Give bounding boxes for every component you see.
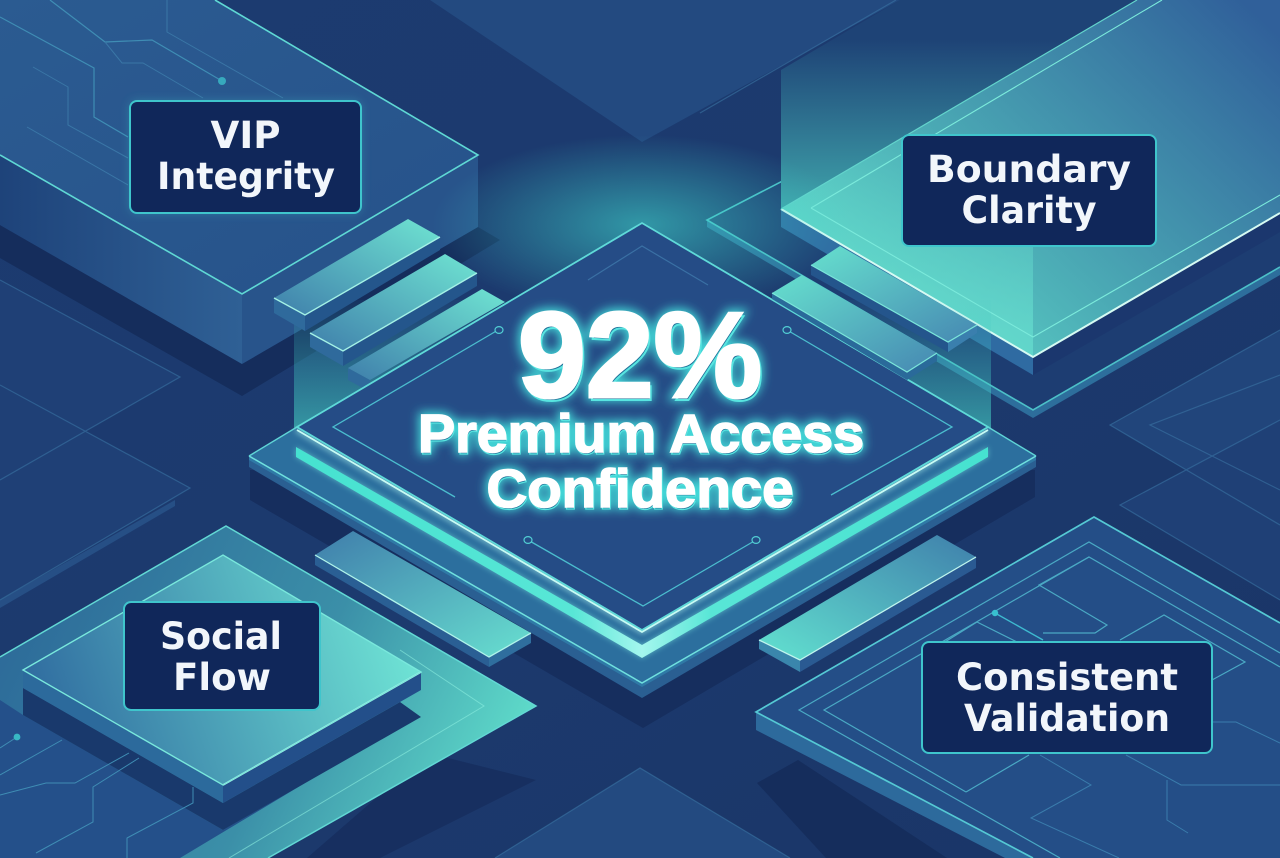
label: Premium Access Confidence: Confidence — [488, 461, 794, 521]
label: Boundary Clarity — [902, 135, 1156, 246]
value: 92%: 92% — [520, 290, 764, 426]
label: Social Flow: Flow — [173, 656, 271, 699]
value: 92%: 92% — [518, 287, 762, 423]
glow: light rising from central platform — [294, 135, 991, 430]
bars: upper right connectors — [772, 246, 977, 380]
panel: central diamond platform — [249, 222, 1036, 698]
shadow: central platform — [250, 470, 1035, 728]
label: Premium Access Confidence: Confidence — [486, 459, 794, 519]
label: Premium Access Confidence: Premium Access — [418, 404, 864, 464]
label: VIP Integrity: Integrity — [157, 155, 335, 198]
label: Premium Access Confidence: Confidence — [486, 459, 794, 519]
label: Social Flow: Social — [160, 615, 282, 658]
label: VIP Integrity: VIP — [210, 114, 280, 157]
label: Boundary Clarity: Clarity — [962, 189, 1096, 232]
label: Premium Access Confidence: Premium Access — [418, 404, 864, 464]
panel: Consistent Validation platform — [756, 517, 1280, 858]
label: Consistent Validation: Consistent — [956, 656, 1178, 699]
bars: upper left connectors — [274, 219, 505, 392]
panel: Social Flow platform — [0, 526, 536, 858]
value: 92%: 92% — [518, 287, 762, 423]
label: Social Flow — [124, 602, 320, 710]
label: VIP Integrity — [130, 101, 361, 213]
label: Boundary Clarity: Boundary — [927, 148, 1131, 191]
panel: VIP Integrity platform — [0, 0, 500, 396]
central headline — [418, 287, 865, 521]
panel: Boundary Clarity platform — [707, 0, 1280, 418]
label: Premium Access Confidence — [418, 404, 865, 521]
label: Consistent Validation — [922, 642, 1212, 753]
label: Premium Access Confidence: Premium Access — [419, 406, 865, 466]
label: Consistent Validation: Validation — [964, 697, 1170, 740]
bars: lower connectors — [315, 531, 976, 672]
